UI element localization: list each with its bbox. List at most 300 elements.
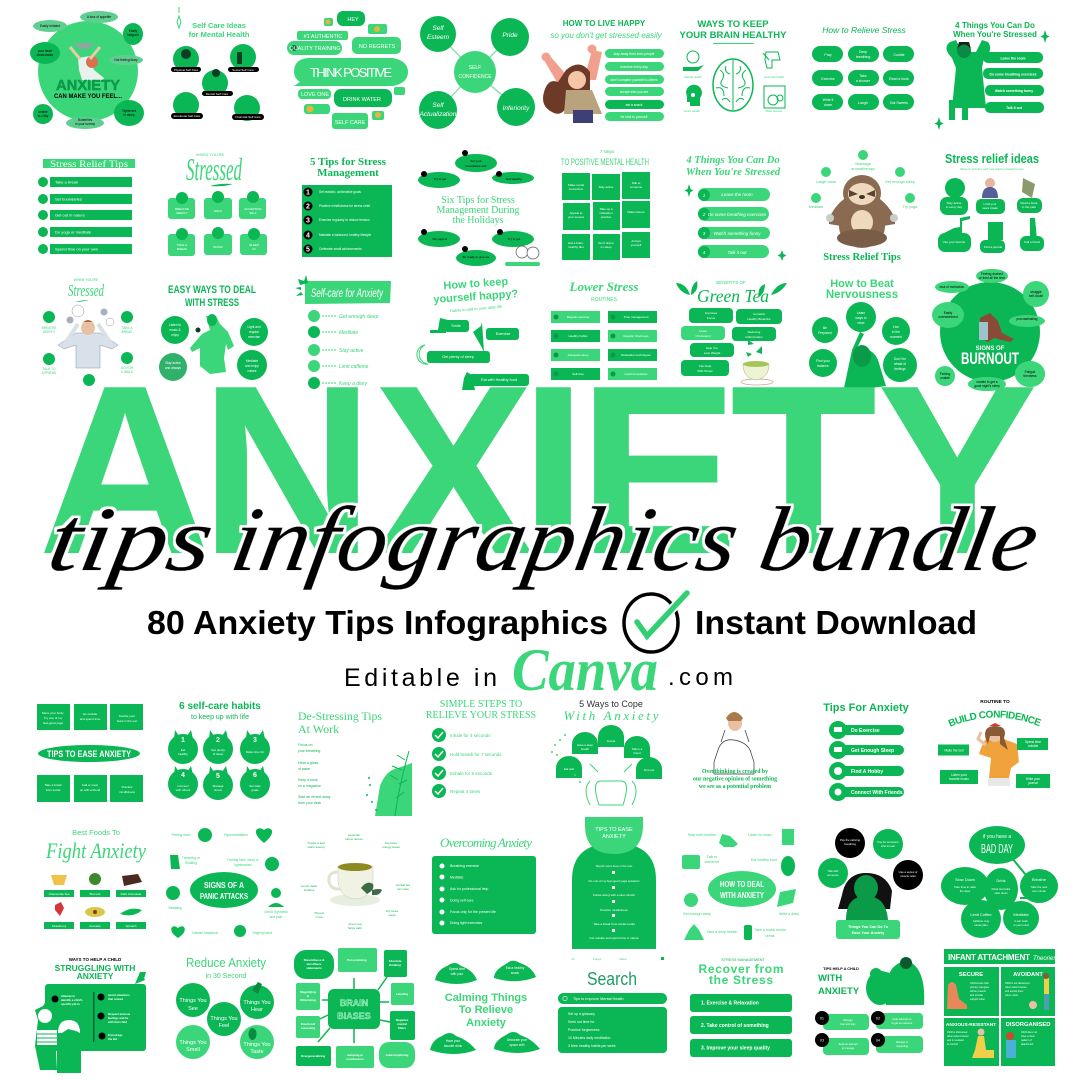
panel: tips help a child with anxiety: fear and stay — [840, 1022, 856, 1026]
panel: how to relieve stress: Eat Sweets — [890, 101, 908, 105]
panel: self-care for anxiety — [295, 275, 391, 389]
panel: 6 self-care habits: Manage — [213, 784, 224, 788]
panel: self-care for anxiety: Get enough sleep — [339, 314, 379, 320]
panel: brain biases mind map: Labeling — [396, 992, 408, 996]
panel: anxiety can make you feel: in sleep — [124, 113, 135, 117]
panel: calming things to relieve anxiety: snack — [511, 971, 520, 975]
panel: 6 self-care habits: Connect — [177, 784, 189, 788]
panel: 6 self-care habits: 3 — [253, 737, 257, 744]
panel: recover from the stress — [690, 958, 792, 1057]
panel: how to beat nervousness: in the — [892, 330, 900, 334]
illustration: confident woman — [978, 723, 1019, 786]
panel: overcoming anxiety: Overcoming Anxiety — [440, 835, 532, 850]
panel: infant attachment theories: primary caregiver — [970, 986, 989, 989]
panel: how to relieve stress: a shower — [856, 79, 871, 83]
panel: tea cup coping: sleep — [388, 913, 396, 917]
panel: recover from the stress: 3. Improve your sleep quality — [701, 1046, 770, 1052]
panel: routine to build confidence: favorite music — [949, 777, 969, 781]
panel: search: Search — [587, 969, 637, 989]
panel: lower stress routines: Time management — [624, 315, 649, 319]
panel: tips to ease anxiety arch: Get outside and spend time in nature — [589, 936, 639, 940]
illustration: woman with black hair — [838, 873, 892, 920]
panel: tea cup coping: can ease — [397, 887, 409, 891]
panel: tips help a child with anxiety: 04 — [876, 1038, 880, 1042]
panel: search: Seek out time for — [568, 1020, 595, 1024]
panel: reduce anxiety in 30 second: See — [188, 1006, 198, 1012]
panel: calming things to relieve anxiety — [430, 961, 540, 1054]
panel: if you have a bad day: Drink tea helps — [992, 887, 1011, 891]
panel: routine to build confidence: ROUTINE TO — [980, 699, 1010, 705]
panel: tips for anxiety: Get Enough Sleep — [851, 748, 894, 754]
panel: 5 tips for stress management: Practice mindfulness for stress relief — [319, 204, 370, 208]
panel: tips to ease anxiety grid: TIPS TO EASE ANXIETY — [47, 749, 131, 759]
panel: if you have a bad day: Slow Down — [955, 877, 975, 882]
panel: if you have a bad day: in your mind — [1013, 923, 1029, 927]
panel: anxiety can make you feel: CAN MAKE YOU FEEL... — [54, 94, 122, 100]
panel: self-care for anxiety: Stay active — [339, 348, 364, 354]
panel: best foods to fight anxiety: Strawberry — [52, 924, 67, 928]
panel: signs of burnout: loss of motivation — [940, 285, 965, 289]
panel: tips help a child with anxiety: to manage — [842, 1046, 855, 1050]
illustration: meditating sloth — [826, 175, 898, 248]
panel: tea cup coping: Lemon balm — [301, 884, 318, 888]
panel: lower stress routines: Healthy habits — [568, 334, 588, 338]
panel: de-stressing tips at work: At Work — [298, 722, 339, 736]
panel: calming things to relieve anxiety: Decorate your — [507, 1038, 528, 1042]
panel: signs of a panic attacks: Tingling hand — [252, 931, 272, 935]
panel: ways to help a child struggling with anxiety: WAYS TO HELP A CHILD — [69, 957, 122, 962]
panel: things you can do to ease your anxiety: Talk with — [828, 869, 839, 873]
panel: tips for anxiety: Find A Hobby — [851, 769, 883, 775]
panel: 6 self-care habits: to keep up with life — [191, 714, 249, 721]
panel: tea cup coping: Thymol — [314, 911, 324, 915]
panel: signs of burnout: procrastinating — [1017, 317, 1038, 321]
panel: six tips for stress management during the holidays: Eat Healthy — [506, 177, 522, 181]
panel: 5 tips for stress management: Maintain a balanced, healthy lifestyle — [319, 233, 371, 237]
panel: self confidence — [419, 16, 535, 129]
panel: things you can do to ease your anxiety: who is near — [881, 844, 895, 848]
panel: tea cup coping: Green tea — [348, 922, 362, 926]
panel: self-care for anxiety: Limit caffeine — [339, 364, 369, 370]
panel: 7 steps to positive mental health: Make leisure — [627, 210, 645, 214]
panel: how to beat nervousness: Find your — [816, 359, 831, 363]
panel: best foods to fight anxiety: Best Foods To — [72, 828, 120, 837]
panel: simple steps to relieve your stress: SIMPLE STEPS TO — [440, 699, 522, 710]
panel: calming things to relieve anxiety: Eat a healthy — [506, 966, 525, 970]
panel: if you have a bad day: BAD DAY — [981, 841, 1013, 856]
panel: easy ways to deal with stress: Meditate — [246, 359, 258, 363]
panel: infant attachment theories: Child knows their — [970, 982, 989, 985]
panel: easy ways to deal with stress: enjoy — [171, 333, 179, 337]
panel: 5 ways to cope with anxiety: Eat well — [564, 767, 574, 771]
illustration: happy woman — [542, 44, 602, 123]
panel: when you're stressed: Stressed — [186, 151, 243, 187]
panel: search: Images — [593, 958, 602, 961]
illustration: parent and child — [866, 957, 924, 1005]
panel: infant attachment theories: when parent leaves — [947, 1035, 969, 1038]
panel: 5 ways to cope with anxiety: Have a deep — [577, 743, 593, 747]
panel: stress relief tips list — [38, 159, 135, 254]
panel: de-stressing tips at work: on a magazine — [298, 784, 321, 788]
panel: 4 things you can do when stressed: When You're Stressed — [953, 30, 1037, 39]
panel: 7 steps to positive mental health: 7 steps — [600, 149, 615, 154]
panel: stress relief tips sloth — [809, 150, 918, 263]
panel: tips help a child with anxiety: Help attempts to — [893, 1017, 912, 1021]
panel: how to keep yourself happy: Eat with Healthy food — [481, 378, 517, 382]
panel: infant attachment theories: when parent leaves — [1005, 986, 1027, 989]
panel: 7 steps to positive mental health: TO POSITIVE MENTAL HEALTH — [561, 157, 649, 167]
panel: signs of a panic attacks: lightheaded — [234, 863, 252, 867]
panel: things you can do to ease your anxiety: Things You Can Do To — [848, 925, 889, 929]
panel: how to relieve stress: Exercise — [821, 77, 835, 81]
panel: signs of burnout: SIGNS OF — [976, 346, 1005, 352]
panel: how to deal with anxiety: break — [766, 934, 775, 938]
panel: best foods to fight anxiety: Chamomile Tea — [49, 892, 70, 896]
panel: brain biases mind map: Overgeneralizing — [301, 1054, 325, 1058]
panel: overcoming anxiety: Breathing exercise — [450, 864, 479, 868]
panel: 5 tips for stress management: Celebrate small achievements — [319, 247, 362, 251]
panel: 5 ways to cope with anxiety: friend — [634, 751, 641, 755]
panel: calming things to relieve anxiety: Anxiety — [466, 1017, 507, 1029]
panel: 6 self-care habits: 5 — [216, 773, 220, 780]
panel: when you're stressed: WHEN YOU'RE — [196, 152, 224, 157]
panel: how to deal with anxiety: Take a social media — [754, 928, 786, 932]
panel: tips help a child with anxiety: 01 — [820, 1016, 824, 1020]
panel: 6 self-care habits: Set daily — [249, 784, 261, 788]
panel: best foods to fight anxiety: Spinach — [126, 924, 137, 928]
panel: benefits of green tea: Cholesterol — [695, 334, 711, 338]
panel: 4 things you can do when stressed: Watch something funny — [995, 89, 1033, 93]
panel: how to live happy: exercise every day — [620, 65, 648, 69]
panel: brain biases mind map: reasoning — [301, 1026, 315, 1030]
panel: anxiety can make you feel: Not feeling Busy — [114, 58, 138, 62]
panel: brain biases mind map: BIASES — [337, 1011, 371, 1021]
panel: how to beat nervousness: How to Beat — [830, 278, 894, 290]
panel: how to beat nervousness: Be — [823, 326, 827, 330]
panel: 7 steps to positive mental health: connection — [569, 187, 584, 191]
panel: stress relief tips list: Set boundaries — [55, 196, 82, 202]
panel: infant attachment theories: attachment — [1021, 1043, 1034, 1046]
panel: easy ways to deal with stress: Light and — [247, 325, 261, 329]
panel: tips help a child with anxiety: 02 — [876, 1016, 880, 1020]
panel: tips for anxiety: Do Exercise — [851, 728, 880, 734]
panel: if you have a bad day: It can work — [1014, 919, 1028, 923]
panel: when you're stressed man: BREATHE — [42, 326, 56, 330]
panel: brain biases mind map: Magnifying — [300, 990, 316, 994]
heading: tips infographics bundle: tips — [41, 489, 221, 591]
panel: 7 steps to positive mental health: practice — [601, 215, 612, 219]
panel: 6 self-care habits: 2 — [216, 737, 220, 744]
panel: tips to ease anxiety grid: Try one of my — [44, 716, 63, 720]
panel: ways to help a child struggling with anxiety: identify a child's — [61, 998, 83, 1002]
panel: brain biases mind map: & — [307, 994, 310, 998]
panel: calming things to relieve anxiety: To Relieve — [459, 1004, 513, 1016]
panel: six tips for stress management during the holidays: Try to get — [434, 177, 446, 181]
panel: 7 steps to positive mental health: Accept — [631, 239, 641, 243]
illustration: nervous woman — [844, 332, 886, 390]
panel: benefits of green tea: Lose Weight — [704, 351, 720, 355]
panel: recover from the stress: 1. Exercise & Relaxation — [701, 1000, 759, 1006]
panel: ways to help a child struggling with anxiety: feelings and be — [108, 1016, 129, 1020]
panel: 4 things italic list: 2 — [702, 212, 706, 217]
panel: tips for anxiety — [823, 702, 910, 801]
panel: tea cup coping: helps calm — [348, 926, 363, 930]
panel: anxiety can make you feel: Tightened — [122, 109, 136, 113]
panel: lower stress routines: Adequate sleep — [568, 353, 589, 357]
panel: tips help a child with anxiety — [815, 957, 924, 1055]
panel: self care ideas: Physical Self Care — [174, 68, 199, 72]
panel: benefits of green tea: BENEFITS OF — [716, 280, 746, 285]
panel: when you're stressed man: TAKE A — [122, 326, 133, 330]
heading: ANXIETY: ANXIETY — [38, 336, 1038, 605]
panel: ways to keep your brain healthy: Mental Health — [684, 75, 702, 79]
panel: 6 self-care habits: 1 — [181, 737, 185, 744]
panel: tips to ease anxiety grid: Move your body. — [42, 711, 64, 715]
panel: signs of burnout: BURNOUT — [961, 350, 1019, 368]
panel: when you're stressed: BREATHE — [175, 207, 189, 211]
panel: self care ideas: for Mental Health — [189, 30, 250, 39]
panel: anxiety can make you feel: fatigued — [127, 33, 139, 37]
panel: how to beat nervousness: moment — [890, 335, 902, 339]
panel: if you have a bad day: cause jitter — [974, 923, 988, 927]
panel: reduce anxiety in 30 second: Taste — [250, 1049, 264, 1055]
panel: when you're stressed: ACCEPTING — [244, 207, 262, 211]
panel: how to beat nervousness: Learn — [857, 311, 865, 315]
panel: how to beat nervousness: afraid of — [894, 362, 906, 366]
panel: 6 self-care habits: of sleep — [213, 752, 224, 756]
panel: stress relief ideas: Ways to practice self care during stressful times — [960, 167, 1024, 171]
panel: stress relief ideas: in every day — [946, 205, 963, 209]
panel: anxiety can make you feel: Butterflies — [78, 118, 92, 122]
panel: how to keep yourself happy: yourself happy? — [433, 288, 519, 306]
panel: how to relieve stress: How to Relieve Stress — [822, 25, 907, 35]
panel: de-stressing tips at work: Keep a book — [298, 778, 318, 782]
panel: brain biases mind map: conclusions — [346, 1057, 364, 1061]
panel: 7 steps to positive mental health: on sleep — [600, 245, 612, 249]
panel: ways to keep your brain healthy — [680, 19, 787, 113]
panel: anxiety can make you feel: beats faster — [37, 53, 54, 57]
icon: brain — [713, 59, 753, 111]
panel: how to live happy: accept who you are — [620, 90, 648, 94]
panel: reduce anxiety in 30 second: Things You — [243, 1042, 271, 1048]
panel: self confidence: Esteem — [427, 34, 450, 41]
panel: stress relief tips sloth: Get enough sleep — [885, 180, 915, 184]
panel: stress relief ideas — [938, 151, 1044, 253]
panel: lower stress routines: Self-time — [572, 372, 584, 376]
panel: 6 self-care habits: 6 — [253, 772, 257, 779]
panel: stress relief ideas: Call a friend — [1024, 240, 1040, 244]
panel: how to live happy: eat a snack — [626, 103, 643, 107]
panel: reduce anxiety in 30 second: Things You — [179, 1040, 207, 1046]
panel: how to beat nervousness: feelings — [894, 367, 906, 371]
panel: things you can do to ease your anxiety: Ease Your Anxiety — [852, 931, 885, 935]
panel: brain biases mind map: mental — [397, 1022, 407, 1026]
panel: routine to build confidence: Listen your — [951, 773, 968, 777]
panel: benefits of green tea: Inflammation — [745, 335, 763, 339]
panel: think positive chat bubbles: THINK POSITIVE — [310, 65, 392, 80]
panel: stress relief ideas: Stress relief ideas — [945, 151, 1039, 166]
panel: self-care for anxiety: Keep a diary — [339, 381, 368, 387]
panel: brain biases mind map: Negative — [396, 1018, 409, 1022]
panel: 5 tips for stress management: 4 — [306, 232, 310, 240]
panel: how to keep yourself happy: Habits to add to your daily life — [450, 304, 503, 313]
panel: infant attachment theories: ANXIOUS-RESISTANT — [946, 1022, 996, 1028]
panel: easy ways to deal with stress: nature — [247, 369, 257, 373]
panel: infant attachment theories: Child does not — [1021, 1031, 1037, 1034]
panel: tea cup coping: energy levels — [382, 845, 400, 849]
panel: brain biases mind map: Jumping to — [347, 1053, 363, 1057]
panel: signs of a panic attacks: and pain — [270, 915, 282, 919]
panel: signs of burnout: overwhelmed — [939, 315, 958, 319]
panel: infant attachment theories: pattern of — [1021, 1039, 1032, 1042]
panel: how to live happy — [542, 19, 664, 123]
panel: 7 steps to positive mental health: Take up a — [599, 207, 613, 211]
panel: how to deal with anxiety: HOW TO DEAL — [720, 880, 764, 889]
panel: calming things to relieve anxiety: Have your — [446, 1039, 461, 1043]
panel: anxiety can make you feel: in your tummy — [75, 122, 95, 126]
panel: think positive chat bubbles: NO REGRETS — [359, 44, 396, 50]
panel: brain biases mind map: Personalizing — [347, 958, 367, 962]
panel: self confidence: Self — [432, 102, 445, 109]
panel: benefits of green tea: Help You — [706, 346, 718, 350]
panel: easy ways to deal with stress: EASY WAYS TO DEAL — [168, 284, 256, 296]
panel: infant attachment theories: support when — [970, 998, 986, 1001]
panel: how to deal with anxiety: Write a diary — [779, 912, 799, 916]
panel: 7 steps to positive mental health: yourself — [631, 243, 641, 247]
panel: 6 self-care habits: Make time for — [246, 750, 264, 754]
thumbnails: bottom three rows — [35, 699, 1058, 1073]
panel: lower stress routines — [551, 279, 657, 380]
panel: de-stressing tips at work: De-Stressing Tips — [298, 709, 382, 723]
illustration: stressed man — [58, 305, 118, 368]
panel: reduce anxiety in 30 second: Things You — [243, 1000, 271, 1006]
panel: 4 things italic list: When You're Stressed — [686, 167, 781, 178]
panel: six tips for stress management during the holidays: boundaries and — [466, 164, 487, 168]
panel: self confidence: Inferiority — [503, 105, 530, 112]
panel: anxiety can make you feel: to chilly — [38, 114, 49, 118]
panel: brain biases mind map: Absolute — [389, 959, 402, 963]
panel: how to deal with anxiety: Talk to — [707, 855, 717, 859]
panel: overthinking — [693, 712, 777, 790]
panel: tips for anxiety: Connect With Friends — [851, 790, 903, 796]
panel: 7 steps to positive mental health: Don't skimp — [598, 241, 614, 245]
panel: 6 self-care habits: stress — [214, 788, 222, 792]
panel: how to keep yourself happy: Smile — [451, 324, 461, 328]
panel: stress relief tips list: Stress Relief Tips — [50, 159, 129, 169]
subheading: 80 anxiety tips infographics: 80 Anxiety Tips Infographics — [147, 604, 608, 641]
panel: 6 self-care habits: 6 self-care habits — [179, 701, 261, 712]
panel: things you can do to ease your anxiety: someone — [827, 873, 839, 877]
panel: tips to ease anxiety arch: Follow along with a slow stretch — [593, 893, 635, 897]
panel: ways to help a child struggling with anxiety: specific job to — [61, 1002, 80, 1006]
panel: how to deal with anxiety: Stop with nicotine — [688, 833, 716, 837]
panel: ways to keep your brain healthy: Brain Games — [766, 109, 783, 113]
panel: reduce anxiety in 30 second: in 30 Second — [206, 973, 247, 980]
panel: tea cup coping: Tracks a leaf — [307, 841, 325, 845]
panel: benefits of green tea: Can Help — [699, 364, 712, 368]
panel: signs of a panic attacks: Trembling or — [182, 856, 201, 860]
panel: 5 ways to cope with anxiety: breath — [581, 747, 589, 751]
panel: ways to help a child struggling with anxiety: that scared — [108, 997, 123, 1001]
icon: check in circle — [624, 593, 687, 652]
panel: how to relieve stress: Deep — [859, 50, 867, 54]
panel: tips to ease anxiety grid: mindfulness — [119, 790, 136, 794]
panel: 4 things you can do when stressed — [934, 21, 1050, 130]
panel: ways to help a child struggling with anxiety: Attempt to — [61, 994, 75, 998]
panel: how to deal with anxiety: someone — [705, 860, 719, 864]
panel: how to relieve stress — [812, 25, 914, 110]
panel: how to beat nervousness — [809, 278, 917, 390]
illustration: woman thinking — [190, 316, 234, 374]
panel: how to live happy: so you don't get stressed easily — [550, 31, 663, 40]
panel: 7 steps to positive mental health: relaxation — [599, 211, 613, 215]
panel: tips to ease anxiety grid: Practice — [122, 785, 133, 789]
panel: reduce anxiety in 30 second: Reduce Anxiety — [186, 955, 266, 970]
panel: when you're stressed man: DEEPLY — [43, 330, 56, 334]
panel: tips to ease anxiety arch — [572, 817, 656, 949]
panel: how to beat nervousness: balance — [817, 364, 829, 368]
panel: calming things to relieve anxiety: Spend time — [449, 967, 465, 971]
panel: tips to ease anxiety arch: Do one of my feel-good yoga sessions — [588, 879, 640, 883]
panel: how to deal with anxiety — [682, 829, 799, 940]
panel: if you have a bad day: Limit Coffee — [970, 912, 992, 917]
panel: stress relief ideas: Read a book — [1020, 201, 1038, 205]
panel: benefits of green tea: Contains — [753, 312, 765, 316]
panel: ways to keep your brain healthy: YOUR BRAIN HEALTHY — [680, 30, 787, 41]
panel: think positive chat bubbles — [287, 11, 408, 129]
panel: anxiety can make you feel: your heart — [38, 49, 52, 53]
panel: stress relief ideas: Find a journal — [984, 245, 1002, 249]
panel: simple steps to relieve your stress: RELIEVE YOUR STRESS — [426, 710, 536, 721]
panel: how to beat nervousness: relax — [857, 321, 865, 325]
panel: self confidence: CONFIDENCE — [458, 74, 492, 80]
panel: signs of burnout: Easily — [944, 311, 953, 315]
panel: how to live happy: stay away from toxic people — [614, 52, 655, 56]
panel: sleep label over heading: tiredness — [1024, 374, 1037, 378]
panel: lower stress routines: ROUTINES — [591, 297, 618, 303]
panel: how to relieve stress: Read a book — [889, 77, 909, 81]
panel: infant attachment theories: will be present — [970, 990, 986, 993]
panel: how to beat nervousness: Live — [893, 325, 899, 329]
panel: de-stressing tips at work: Start an errand away — [298, 795, 331, 799]
panel: think positive chat bubbles: HEY — [347, 17, 359, 23]
panel: lower stress routines: Relaxation techniques — [621, 353, 651, 357]
panel: de-stressing tips at work: Have a glass — [298, 761, 318, 765]
illustration: stressed woman in coat — [946, 40, 990, 120]
panel: things you can do to ease your anxiety: muscle relax — [900, 874, 916, 878]
panel: 6 self-care habits: with others — [176, 788, 191, 792]
panel: de-stressing tips at work: of water — [298, 767, 311, 771]
panel: infant attachment theories: and provide — [970, 994, 984, 997]
panel: when you're stressed: MUSIC — [213, 245, 224, 249]
panel: things you can do to ease your anxiety: Pay for someone — [877, 840, 899, 844]
panel: 4 things italic list — [684, 155, 786, 261]
heading: tips infographics bundle: infographics — [224, 489, 746, 591]
panel: how to live happy: don't compare yourself to others — [610, 78, 658, 82]
panel: sleep label over heading: Fatigue — [1025, 370, 1036, 374]
panel: how to relieve stress: Laugh — [858, 101, 868, 105]
panel: if you have a bad day: Meditate — [1013, 912, 1029, 917]
panel: self confidence: Actualization — [419, 111, 457, 118]
panel: tips for anxiety: Tips For Anxiety — [823, 702, 910, 714]
panel: overcoming anxiety: Doing light exercises — [450, 921, 483, 925]
panel: signs of a panic attacks: PANIC ATTACKS — [200, 892, 248, 901]
panel: easy ways to deal with stress: music & — [169, 328, 182, 332]
panel: tips to ease anxiety grid: Call or meet — [82, 783, 98, 787]
panel: reduce anxiety in 30 second — [176, 955, 274, 1059]
panel: if you have a bad day: if you have a — [983, 834, 1011, 840]
panel: 7 steps to positive mental health: Make social — [568, 183, 584, 187]
